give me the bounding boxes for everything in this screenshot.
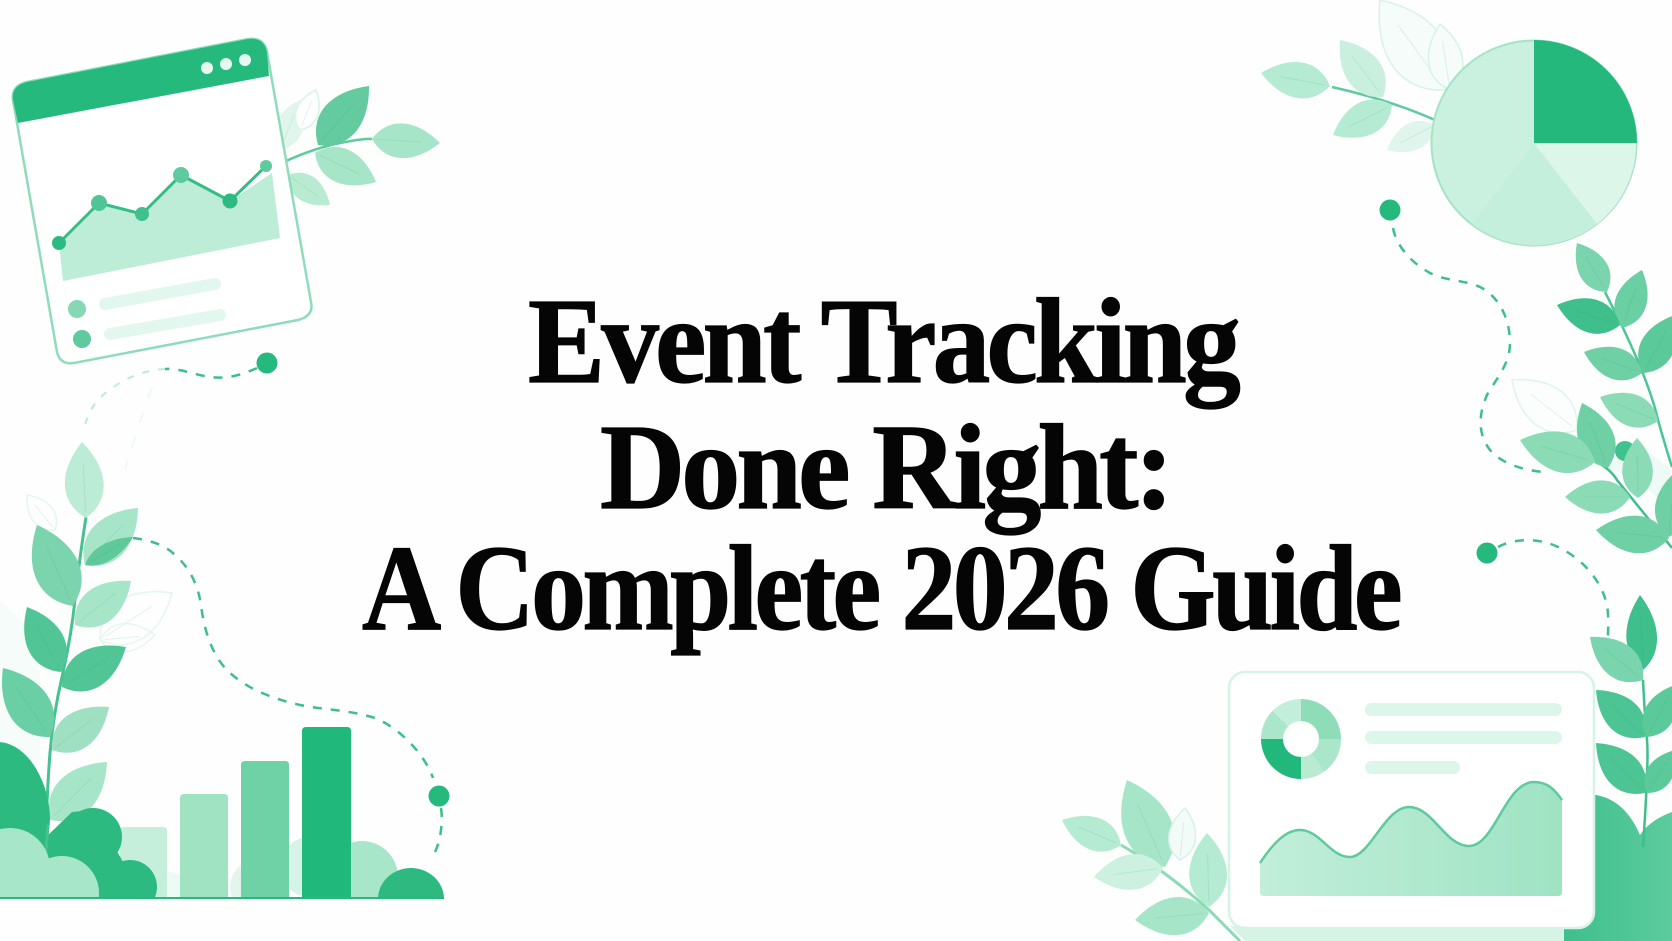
backing shape <box>1564 795 1672 941</box>
title: A Complete 2026 Guide <box>362 521 1400 656</box>
bottom-center sprig <box>1056 770 1240 941</box>
card frame <box>1229 672 1594 928</box>
large dark leaf <box>0 742 50 848</box>
faint background shapes <box>167 838 398 897</box>
bar chart <box>120 727 351 899</box>
bushes <box>0 808 444 897</box>
dashed connector: top-right node <box>1380 200 1543 472</box>
right plant upper <box>1499 235 1672 557</box>
text placeholder lines <box>1365 703 1562 774</box>
donut chart <box>1261 699 1341 779</box>
dashboard card panel <box>1229 672 1594 928</box>
stem <box>46 517 88 803</box>
ground line <box>0 897 444 899</box>
area under line <box>59 173 280 281</box>
area chart <box>1260 782 1562 896</box>
dashed connector: bottom-left node <box>133 538 450 852</box>
bottom-left plant <box>0 441 444 930</box>
outline leaves <box>26 494 173 653</box>
top-right plant sprig <box>1258 0 1468 162</box>
title: Event Tracking <box>528 274 1240 409</box>
data points <box>52 160 272 250</box>
window title bar <box>13 39 269 123</box>
dashed connector: top-left node <box>85 352 278 470</box>
window control dots <box>201 54 251 74</box>
dashed connector: bottom-right node <box>1476 540 1608 637</box>
leaves <box>2 442 138 822</box>
right plant lower <box>1230 594 1672 941</box>
window frame <box>13 39 311 363</box>
pie chart <box>1432 40 1637 246</box>
title <box>362 274 1400 656</box>
title: Done Right: <box>600 400 1170 535</box>
browser window panel with line chart <box>13 39 311 363</box>
trend line <box>59 166 266 243</box>
list rows <box>68 284 220 348</box>
top-left plant sprig <box>267 73 441 216</box>
